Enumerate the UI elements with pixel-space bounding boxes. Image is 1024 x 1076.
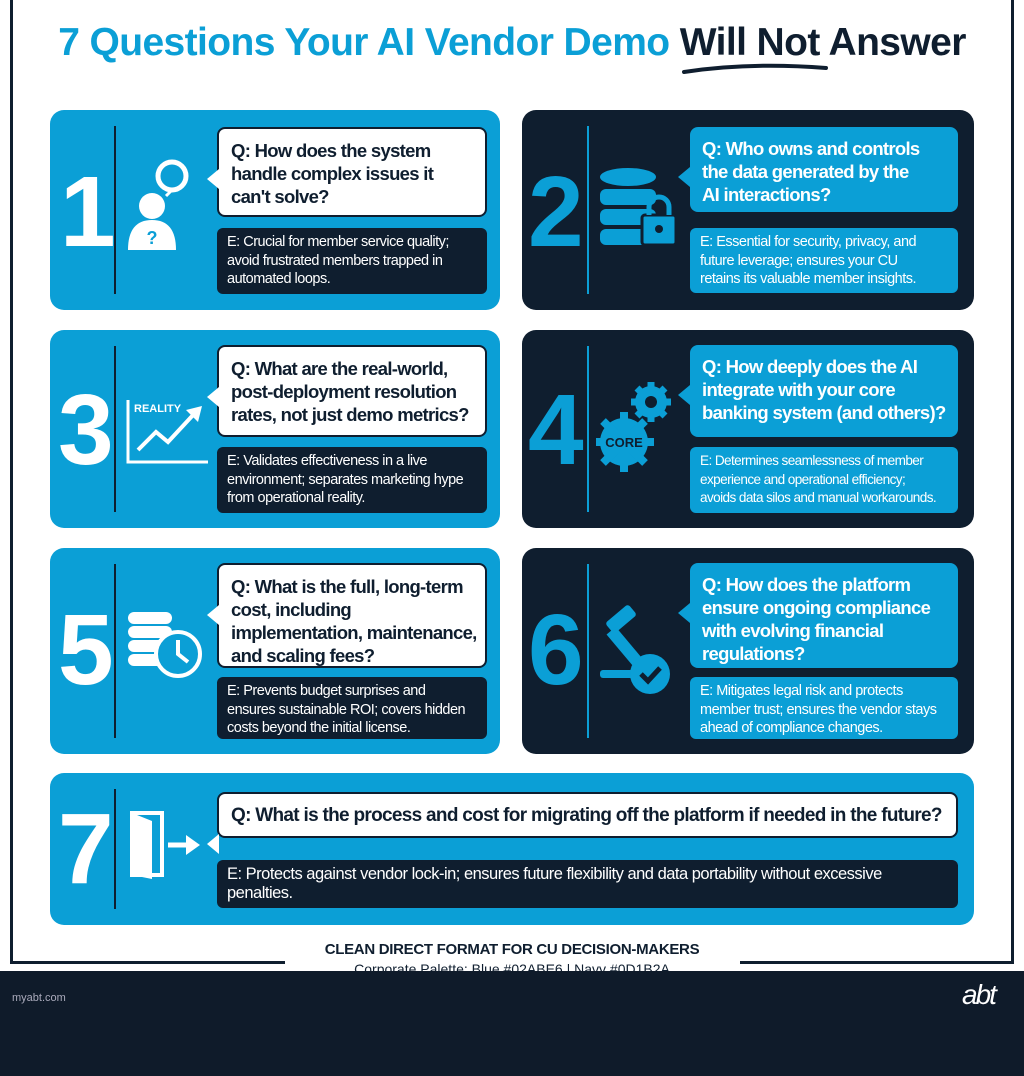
explanation: experience and operational efficiency; — [700, 472, 905, 486]
icon: gears core: CORE — [605, 435, 643, 450]
footer url: myabt.com — [12, 992, 66, 1004]
icon: gavel check — [600, 605, 670, 694]
explanation: retains its valuable member insights. — [700, 271, 916, 287]
question bubble: with evolving financial — [702, 620, 883, 641]
explanation: from operational reality. — [227, 490, 365, 506]
icon: support agent: ? — [146, 228, 158, 248]
question bubble: post-deployment resolution — [231, 381, 456, 402]
footer bar — [0, 971, 1024, 1076]
icon: gears core — [596, 382, 671, 472]
panel: question 4 — [522, 330, 974, 528]
panel: question 2 — [522, 110, 974, 310]
explanation — [217, 447, 487, 513]
explanation: environment; separates marketing hype — [227, 472, 463, 488]
footer caption: CLEAN DIRECT FORMAT FOR CU DECISION-MAKERS — [325, 941, 699, 958]
question bubble — [217, 563, 487, 668]
question bubble — [690, 345, 958, 437]
question bubble: Q: What is the process and cost for migrating off the platform if needed in the future? — [231, 805, 942, 826]
icon: exit door — [130, 811, 200, 879]
explanation: future leverage; ensures your CU — [700, 252, 898, 268]
question bubble: can't solve? — [231, 186, 329, 207]
question bubble — [690, 127, 958, 212]
explanation — [217, 860, 958, 908]
question bubble — [690, 563, 958, 668]
logo: abt: abt — [962, 979, 995, 1010]
icon: reality chart — [126, 400, 208, 464]
icon: reality chart: REALITY — [134, 403, 182, 415]
panel: question 7 — [50, 773, 974, 925]
explanation: E: Crucial for member service quality; — [227, 234, 449, 250]
explanation: costs beyond the initial license. — [227, 720, 410, 736]
number 5: 5 — [58, 594, 111, 706]
question bubble: banking system (and others)? — [702, 402, 946, 423]
explanation: automated loops. — [227, 271, 330, 287]
question bubble — [217, 345, 487, 437]
explanation: avoids data silos and manual workarounds. — [700, 490, 936, 505]
explanation — [217, 228, 487, 294]
question bubble: Q: How does the platform — [702, 574, 910, 595]
number 3: 3 — [58, 374, 111, 486]
explanation — [690, 677, 958, 739]
explanation: E: Determines seamlessness of member — [700, 453, 923, 468]
explanation: ahead of compliance changes. — [700, 720, 883, 736]
panel: question 1 — [50, 110, 500, 310]
icon: support agent — [128, 160, 188, 250]
explanation: E: Validates effectiveness in a live — [227, 453, 427, 469]
question bubble: the data generated by the — [702, 161, 909, 182]
title: 7 Questions Your AI Vendor Demo Will Not Answer — [58, 21, 966, 64]
panel: question 6 — [522, 548, 974, 754]
number 2: 2 — [528, 156, 581, 268]
explanation: E: Protects against vendor lock-in; ensures future flexibility and data portability without excessive — [227, 865, 882, 883]
explanation: penalties. — [227, 884, 293, 902]
question bubble: rates, not just demo metrics? — [231, 404, 469, 425]
question bubble: regulations? — [702, 643, 805, 664]
question bubble: and scaling fees? — [231, 645, 374, 666]
question bubble: Q: What are the real-world, — [231, 358, 448, 379]
explanation — [690, 447, 958, 513]
explanation: ensures sustainable ROI; covers hidden — [227, 702, 465, 718]
icon: coins clock — [128, 612, 202, 678]
question bubble: integrate with your core — [702, 379, 895, 400]
title underline — [682, 64, 828, 74]
question bubble: ensure ongoing compliance — [702, 597, 930, 618]
palette note: Corporate Palette: Blue #02ABE6 | Navy #0D1B2A — [354, 961, 670, 977]
panel: question 5 — [50, 548, 500, 754]
question bubble: Q: Who owns and controls — [702, 138, 920, 159]
explanation: E: Mitigates legal risk and protects — [700, 683, 903, 699]
question bubble: handle complex issues it — [231, 163, 433, 184]
number 6: 6 — [528, 594, 581, 706]
explanation: E: Essential for security, privacy, and — [700, 234, 916, 250]
panel: question 3 — [50, 330, 500, 528]
frame gap for footer caption — [285, 955, 740, 969]
question bubble — [217, 792, 958, 838]
explanation: E: Prevents budget surprises and — [227, 683, 425, 699]
explanation: member trust; ensures the vendor stays — [700, 702, 936, 718]
explanation — [217, 677, 487, 739]
explanation: avoid frustrated members trapped in — [227, 252, 442, 268]
question bubble: AI interactions? — [702, 184, 831, 205]
icon: database lock — [600, 168, 674, 245]
question bubble — [217, 127, 487, 217]
number 1: 1 — [60, 156, 113, 268]
question bubble: cost, including — [231, 599, 351, 620]
question bubble: Q: How does the system — [231, 140, 430, 161]
number 4: 4 — [528, 374, 581, 486]
question bubble: implementation, maintenance, — [231, 622, 477, 643]
number 7: 7 — [58, 793, 111, 905]
explanation — [690, 228, 958, 293]
question bubble: Q: How deeply does the AI — [702, 356, 917, 377]
question bubble: Q: What is the full, long-term — [231, 576, 463, 597]
